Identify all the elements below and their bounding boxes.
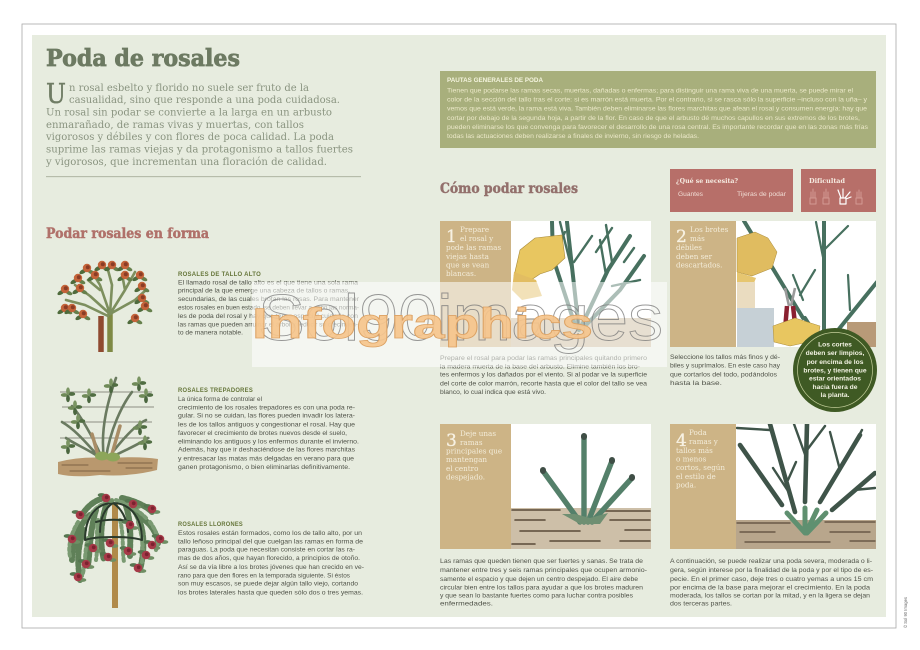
step 3 illustration: main stems in soil [511, 436, 651, 549]
step 4 text: gera, según interese por la finalidad de la poda y por el tipo de es- [670, 567, 873, 574]
step 3 [440, 424, 651, 608]
step 1 caption: 1 [446, 227, 457, 247]
intro text block: y vigorosos, que incrementan una floración de calidad. [45, 157, 327, 168]
step 4 caption: Poda [689, 428, 707, 437]
intro text block: enmarañado, de ramas vivas y muertas, con tallos [46, 120, 304, 131]
panel: dificultad: Dificultad [809, 177, 846, 185]
panel: pautas generales de poda: cortar por debajo de la segunda hoja, a partir de la flor. En caso de que el arbusto dé muchos capullos en sus extremos de los brotes, [447, 115, 860, 122]
intro text block: U [46, 79, 66, 110]
text: rosales trepadores: Además, hay que ir deshaciéndose de las flores marchitas [178, 447, 356, 454]
step 4 text: moderada, los tallos se cortan por la mitad, y en la ligera se dejan [670, 593, 870, 600]
text: rosales trepadores: les de los tallos antiguos y congestionar el rosal. Hay que [178, 422, 355, 429]
step 3 text: Las ramas que queden tienen que ser fuertes y sanas. Se trata de [440, 558, 643, 565]
panel: dificultad [801, 169, 876, 212]
step 3 caption: ramas [460, 438, 483, 447]
text: rosales de tallo alto [178, 271, 360, 337]
text: rosales de tallo alto: to de manera notable. [178, 330, 243, 337]
text: rosales de tallo alto: secundarias, de las cuales brotan las rosas. Para mantener [178, 296, 360, 303]
step 4 illustration: cut stems [736, 424, 876, 549]
callout circle: deben ser limpios, [806, 350, 865, 357]
text: rosales trepadores: crecimiento de los rosales trepadores es con una poda re- [178, 404, 355, 411]
intro text block: suprime las ramas viejas y da protagonismo a tallos fuertes [46, 144, 353, 156]
step 1 caption: que se vean [446, 260, 490, 270]
step 1 text: tes enfermos y los dañados por el viento. Si al podar ve la superficie [440, 372, 647, 379]
title: Poda de rosales [46, 45, 240, 72]
step 2 text: biles y suprímalos. En este caso hay [670, 363, 781, 370]
panel: pautas generales de poda: vemos que está verde, la rama está viva. También deben eliminarse las flores marchitas que afean el rosal y consumen energía: hay que [447, 106, 867, 113]
callout circle: hacia fuera de [813, 384, 858, 391]
text: rosales trepadores: gular. Si no se cuidan, las flores pueden invadir los latera- [178, 413, 355, 420]
illustration: standard rose tree [57, 261, 153, 352]
illustration: weeping rose with dome frame [64, 493, 168, 608]
text: rosales trepadores: ganen protagonismo, o bien eliminarlas definitivamente. [178, 464, 350, 471]
text: rosales de tallo alto: principal de la que emerge una cabeza de tallos o ramas, [178, 288, 350, 295]
step 1 text: la madera muerta de la base del arbusto. Elimine también los bro- [440, 363, 640, 370]
step 2 caption: deben ser [676, 252, 713, 261]
step 1 caption: pode las ramas [446, 243, 501, 252]
step 2 text: hasta la base. [670, 380, 722, 387]
panel: qué se necesita: Guantes [678, 191, 704, 198]
step 1 text [440, 355, 647, 396]
callout circle: la planta. [820, 392, 850, 399]
step 2 text [670, 354, 781, 387]
intro text block: Un rosal sin podar se convierte a la larga en un arbusto [46, 108, 332, 118]
step 3 text: y que sean lo bastante fuertes como para luchar contra posibles [440, 593, 634, 600]
text: rosales trepadores: La única forma de controlar el [178, 396, 263, 403]
step 2 caption: más [690, 234, 705, 243]
step 1 text: del corte de color marrón, recorte hasta que el color del tallo se vea [440, 381, 647, 388]
panel: pautas generales de poda: todas las actuaciones deben realizarse a finales de invierno, sin riesgo de heladas. [447, 133, 699, 140]
text: rosales llorones: los brotes laterales hasta que queden sólo dos o tres yemas. [178, 589, 363, 596]
text: rosales llorones: ROSALES LLORONES [178, 521, 243, 528]
text: rosales llorones: Estos rosales están formados, como los de tallo alto, por un [178, 530, 362, 537]
step 3 caption: despejado. [446, 472, 485, 482]
step 4 caption: cortos, según [676, 463, 725, 472]
step 4 caption: tallos más [676, 446, 713, 455]
step 1 caption [445, 225, 501, 278]
copyright note: © Sol 90 Images [903, 597, 908, 628]
heading: podar rosales en forma: Podar rosales en forma [46, 226, 209, 242]
callout circle: estar orientados [809, 376, 861, 383]
panel: qué se necesita: Tijeras de podar [737, 191, 787, 198]
step 2 text: que cortarlos del todo, podándolos [670, 372, 778, 379]
step 3 text: enfermedades. [440, 601, 493, 608]
step 1 caption: Prepare [460, 225, 489, 234]
step 3 caption: Deje unas [460, 429, 496, 438]
intro text block: n rosal esbelto y florido no suele ser fruto de la [69, 83, 309, 94]
step 2 caption [676, 225, 729, 270]
panel: qué se necesita [670, 169, 793, 212]
step 2 caption: débiles [676, 243, 702, 252]
step 3 text [440, 558, 647, 608]
icon: difficulty hands [810, 189, 862, 204]
step 4 text [670, 558, 874, 608]
step 1 text: blanco, lo cual indica que está vivo. [440, 389, 546, 396]
text: rosales llorones: Así se da vía libre a los brotes jóvenes que han crecido en ve- [178, 564, 364, 571]
intro text block [45, 79, 353, 168]
illustration: climbing rose on wires [58, 376, 158, 476]
text: rosales de tallo alto: estos rosales en buen estado, se deben llevar a cabo las norma- [178, 304, 359, 312]
panel: qué se necesita: ¿Qué se necesita? [676, 177, 738, 185]
step 1 text: Prepare el rosal para podar las ramas principales quitando primero [440, 355, 647, 362]
text: rosales llorones [178, 521, 364, 596]
panel: pautas generales de poda: pueden eliminarse los que convenga para favorecer el desarrollo de una rosa central. Es importante recordar que en las zonas más frías [447, 124, 869, 131]
step 1 [440, 221, 651, 396]
step 2 [670, 221, 877, 387]
step 4 caption: o menos [676, 454, 707, 464]
step 4 text: por encima de la base para mejorar el crecimiento. En la poda [670, 584, 870, 591]
text: rosales llorones: paraguas. La poda que necesitan consiste en cortar las ra- [178, 547, 355, 554]
text: rosales llorones: mas de dos años, que hayan florecido, a principios de otoño. [178, 555, 360, 562]
step 2 illustration: pruning shears [737, 221, 877, 348]
intro text block: casualidad, sino que responde a una poda cuidadosa. [69, 95, 340, 106]
text: rosales de tallo alto: El llamado rosal de tallo alto es el que tiene una sola rama [178, 279, 358, 286]
step 3 text: samente el espacio y que dejen un centro despejado. El aire debe [440, 576, 638, 583]
step 3 caption: 3 [446, 431, 457, 451]
step 3 caption: el centro [446, 464, 478, 473]
step 2 caption: 2 [676, 227, 687, 247]
text: rosales llorones: tallo leñoso principal del que cuelgan las ramas en forma de [178, 538, 363, 545]
step 4 text: pecie. En el primer caso, deje tres o cuatro yemas a unos 15 cm [670, 576, 874, 583]
intro text block: vigorosos y débiles y con flores de poca calidad. La poda [45, 132, 334, 143]
step 4 caption: poda. [676, 480, 696, 490]
text: rosales de tallo alto: ROSALES DE TALLO ALTO [178, 271, 261, 278]
step 2 caption: Los brotes [690, 225, 729, 234]
step 3 text: circular bien entre los tallos para ayudar a que los brotes maduren [440, 584, 643, 591]
heading: cómo podar rosales: Cómo podar rosales [440, 181, 578, 197]
text: rosales trepadores: favorecer el crecimiento de brotes nuevos desde el suelo, [178, 430, 347, 437]
watermark: Infographics [252, 300, 593, 348]
step 4 caption: 4 [676, 431, 687, 451]
step 3 text: mantener entre tres y seis ramas principales que ocupen armonio- [440, 567, 647, 574]
callout circle: por encima de los [807, 359, 864, 366]
panel: pautas generales de poda [440, 71, 876, 148]
text: rosales de tallo alto: les de poda del rosal y hay que tener especial cuidado con [178, 313, 358, 320]
step 2 caption: descartados. [676, 260, 722, 270]
text: rosales llorones: rano para que den flores en la temporada siguiente. Si éstos [178, 572, 351, 579]
panel: pautas generales de poda: Tienen que podarse las ramas secas, muertas, dañadas o enfermas; para distinguir una rama viva de una muerta, se puede mirar el [447, 88, 854, 95]
step 1 caption: el rosal y [460, 234, 494, 243]
step 4 text: A continuación, se puede realizar una poda severa, moderada o li- [670, 558, 872, 565]
step 1 caption: blancas. [446, 269, 476, 278]
callout circle: Los cortes [818, 342, 852, 349]
watermark: Sol90images [258, 281, 663, 354]
callout circle: brotes, y tienen que [803, 368, 867, 375]
step 4 caption: ramas y [689, 437, 719, 446]
step 1 illustration: gloved hand and stems [511, 222, 651, 347]
text: rosales trepadores: eliminando los antiguos y los enfermos durante el invierno. [178, 438, 359, 445]
step 3 caption: principales que [446, 447, 502, 456]
step 3 caption: mantengan [446, 455, 487, 464]
step 4 caption [676, 428, 725, 490]
text: rosales de tallo alto: las ramas que pueden arruinar el árbol y reducir su crecimien- [178, 321, 358, 328]
step 3 caption [446, 429, 502, 482]
panel: pautas generales de poda: PAUTAS GENERALES DE PODA [447, 77, 543, 84]
panel: pautas generales de poda: color de la sección del tallo tras el corte: si es marrón está muerta. Por el contrario, si se rasca sólo la superficie –incluso con la uña– y [447, 97, 868, 104]
step 1 caption: viejas hasta [445, 252, 490, 261]
step 4 text: dos terceras partes. [670, 601, 732, 608]
text: rosales trepadores: y entresacar las matas más delgadas en verano para que [178, 456, 354, 463]
text: rosales llorones: son muy escasos, se puede dejar algún tallo viejo, cortando [178, 581, 358, 588]
text: rosales trepadores: ROSALES TREPADORES [178, 387, 253, 394]
text: rosales trepadores [178, 387, 359, 471]
callout circle [793, 328, 877, 412]
step 4 caption: el estilo de [676, 472, 716, 481]
step 2 text: Seleccione los tallos más finos y dé- [670, 354, 780, 361]
step 4 [670, 424, 876, 608]
